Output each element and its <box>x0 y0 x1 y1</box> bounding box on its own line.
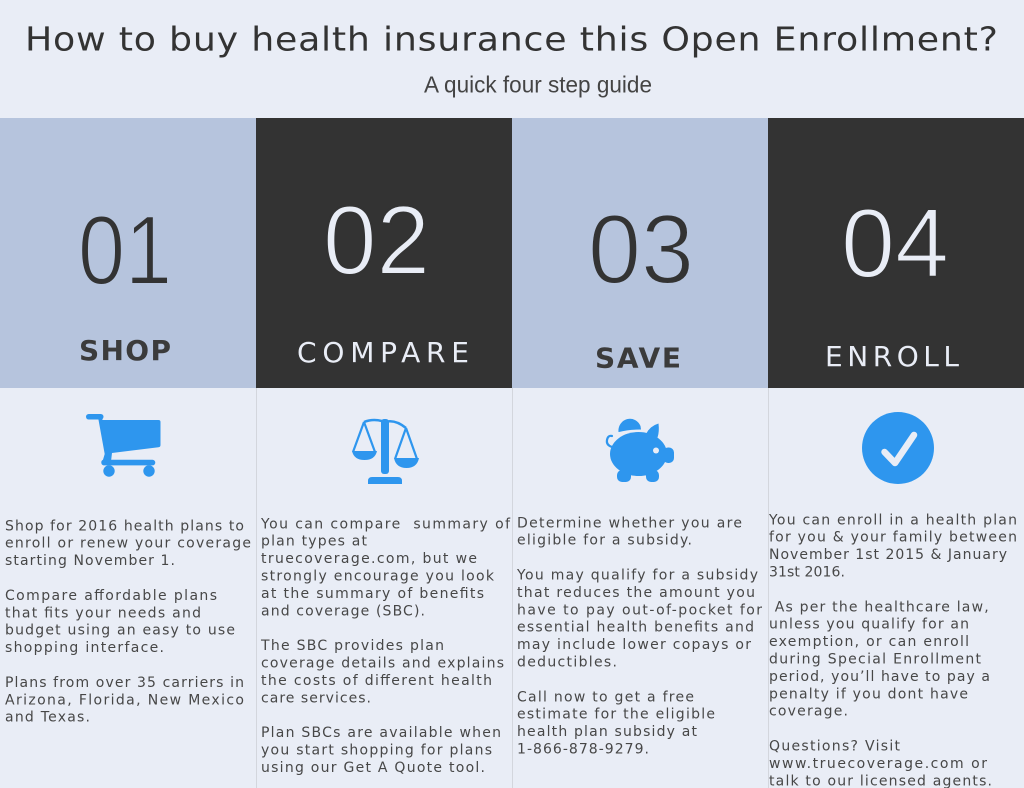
number 03: 03 <box>588 194 694 304</box>
text block: save: that reduces the amount you <box>517 585 755 601</box>
text block: shop: Plans from over 35 carriers in <box>5 675 244 691</box>
text block: compare: care services. <box>261 690 371 706</box>
icon: balance scales <box>352 419 419 484</box>
text block: enroll: during Special Enrollment <box>769 652 982 668</box>
text block: enroll: coverage. <box>769 704 848 720</box>
text block: compare: The SBC provides plan <box>260 638 444 654</box>
panel: step 01 shop <box>0 118 256 388</box>
text block: compare: You can compare summary of <box>260 516 511 532</box>
text block: enroll: unless you qualify for an <box>769 617 969 633</box>
text block: shop: enroll or renew your coverage <box>5 536 251 552</box>
number 01: 01 <box>78 195 172 305</box>
text block: enroll: penalty if you dont have <box>769 686 968 702</box>
text block: shop: Arizona, Florida, New Mexico <box>5 692 244 708</box>
text block: save: health plan subsidy at <box>517 724 698 740</box>
text block: enroll: for you & your family between <box>769 530 1017 546</box>
text block: enroll: www.truecoverage.com or <box>769 756 987 772</box>
text block: save: eligible for a subsidy. <box>517 533 692 549</box>
text block: shop: starting November 1. <box>5 553 175 569</box>
label enroll: ENROLL <box>825 340 959 373</box>
text block: shop: Compare affordable plans <box>5 588 217 604</box>
text block: save: 1-866-878-9279. <box>517 742 649 758</box>
text block: compare: Plan SBCs are available when <box>261 725 501 741</box>
text block: shop: budget using an easy to use <box>5 623 235 639</box>
text block: shop: shopping interface. <box>5 640 164 656</box>
text block: enroll: As per the healthcare law, <box>775 599 989 615</box>
text block: shop: Shop for 2016 health plans to <box>5 518 244 534</box>
title: How to buy health insurance this Open Enrollment? <box>25 21 998 59</box>
text block: compare: and coverage (SBC). <box>261 603 425 619</box>
subtitle: A quick four step guide <box>424 72 652 98</box>
label save: SAVE <box>595 342 681 375</box>
text block: compare: you start shopping for plans <box>261 742 492 758</box>
text block: compare: using our Get A Quote tool. <box>261 760 485 776</box>
text block: save <box>516 515 762 758</box>
text block: save: may include lower copays or <box>517 637 751 653</box>
text block: save: Call now to get a free <box>517 689 694 705</box>
text block: compare: at the summary of benefits <box>261 586 484 602</box>
text block: enroll <box>768 512 1017 788</box>
icon: piggy bank <box>607 419 674 482</box>
text block: compare <box>260 516 511 776</box>
number 02: 02 <box>323 185 430 295</box>
panel: step 02 compare <box>256 118 512 388</box>
text block: save: essential health benefits and <box>517 620 754 636</box>
text block: enroll: 31st 2016. <box>769 564 845 580</box>
text block: enroll: Questions? Visit <box>769 738 900 754</box>
number 04: 04 <box>841 188 949 298</box>
panel: step 04 enroll <box>768 118 1024 388</box>
text block: compare: coverage details and explains <box>261 656 504 672</box>
text block: compare: strongly encourage you look <box>261 568 495 584</box>
icon: check mark circle <box>862 412 934 484</box>
text block: shop <box>5 518 251 726</box>
text block: save: Determine whether you are <box>517 515 742 531</box>
icon: shopping cart <box>86 414 160 477</box>
text block: shop: and Texas. <box>5 710 90 726</box>
text block: save: estimate for the eligible <box>517 707 715 723</box>
text block: enroll: period, you’ll have to pay a <box>769 669 990 685</box>
label shop: SHOP <box>79 334 171 367</box>
text block: shop: that fits your needs and <box>5 605 201 621</box>
text block: save: deductibles. <box>517 654 617 670</box>
text block: enroll: November 1st 2015 & January <box>769 547 1007 563</box>
text block: save: You may qualify for a subsidy <box>516 568 758 584</box>
text block: compare: plan types at <box>261 534 368 550</box>
text block: compare: truecoverage.com, but we <box>261 551 477 567</box>
text block: save: have to pay out-of-pocket for <box>517 602 762 618</box>
text block: compare: the costs of different health <box>261 673 492 689</box>
panel: step 03 save <box>512 118 768 388</box>
text block: enroll: exemption, or can enroll <box>769 634 969 650</box>
text block: enroll: You can enroll in a health plan <box>768 512 1017 528</box>
label compare: COMPARE <box>297 336 469 369</box>
